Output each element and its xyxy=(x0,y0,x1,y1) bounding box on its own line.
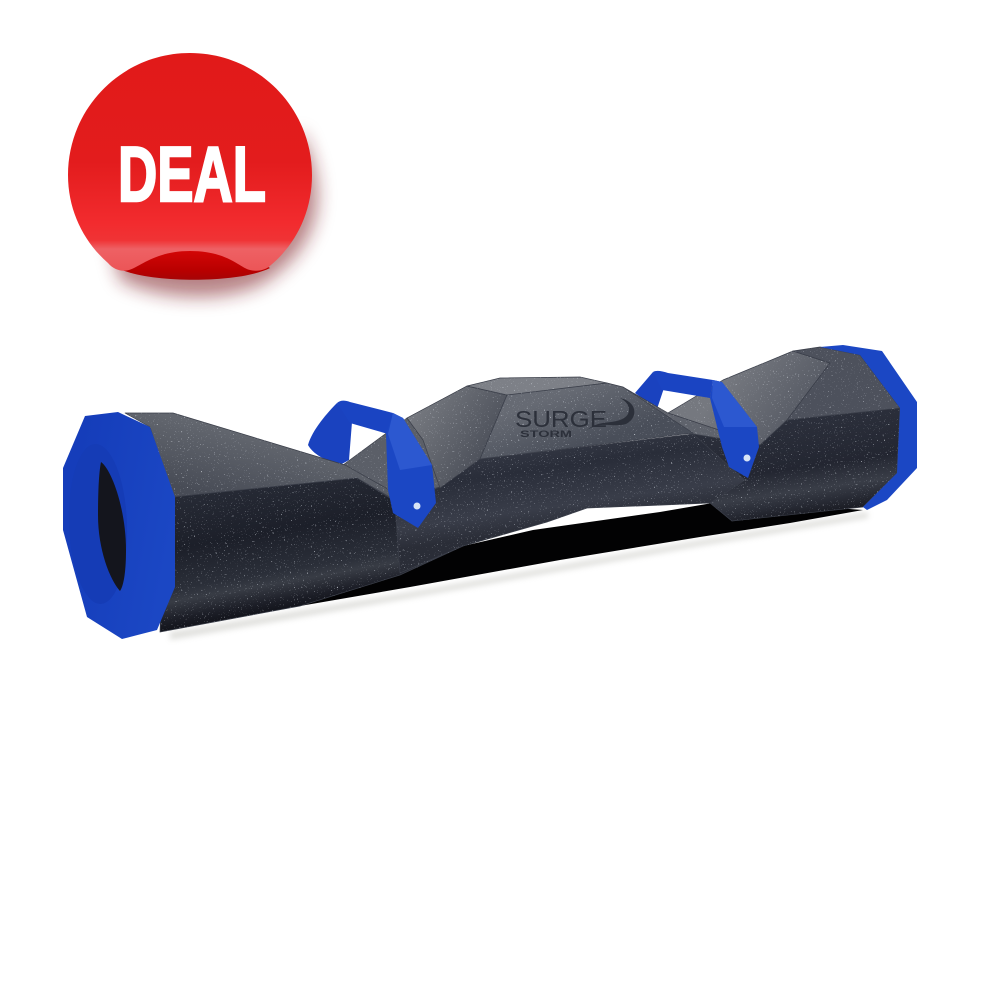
right ramp behind handle xyxy=(623,380,790,447)
ground shadow xyxy=(170,512,868,640)
product: surge storm bag xyxy=(63,345,917,640)
handle highlight xyxy=(712,380,757,427)
center side facet xyxy=(407,386,507,488)
speckled body xyxy=(125,347,900,632)
badge label: DEAL xyxy=(118,130,266,218)
back handle leg left xyxy=(308,403,352,465)
embossed logo xyxy=(515,398,634,439)
center logo facet xyxy=(480,383,693,459)
left ramp behind handle xyxy=(343,386,480,500)
handle grip xyxy=(710,380,759,478)
handle screw xyxy=(744,454,750,462)
badge sticker circle xyxy=(68,53,312,271)
deal badge xyxy=(68,53,318,297)
cap inner ring xyxy=(66,443,130,605)
back handle leg right xyxy=(635,372,664,409)
left front handle xyxy=(337,401,436,528)
handle grip xyxy=(386,413,436,528)
center top plate xyxy=(467,377,607,395)
right front handle xyxy=(653,371,759,478)
badge curled flap xyxy=(120,250,270,280)
logo waves xyxy=(586,398,634,431)
right section rear facet xyxy=(668,351,830,445)
logo word storm: STORM xyxy=(520,429,572,439)
left section top facet xyxy=(125,413,400,503)
handle highlight xyxy=(388,413,432,470)
handle bar xyxy=(653,371,713,398)
handle bar xyxy=(337,401,393,434)
cap opening xyxy=(98,462,126,591)
logo word surge: SURGE xyxy=(515,406,607,432)
center front band xyxy=(395,434,745,573)
left end cap xyxy=(63,412,175,639)
right section front xyxy=(693,408,900,521)
cap outer xyxy=(63,412,175,639)
right section upper facet xyxy=(787,347,900,420)
black under shadow xyxy=(160,500,863,632)
handle screw xyxy=(414,502,420,510)
left section front xyxy=(160,459,480,632)
right end cap xyxy=(820,345,917,510)
badge drop shadow xyxy=(110,130,318,297)
